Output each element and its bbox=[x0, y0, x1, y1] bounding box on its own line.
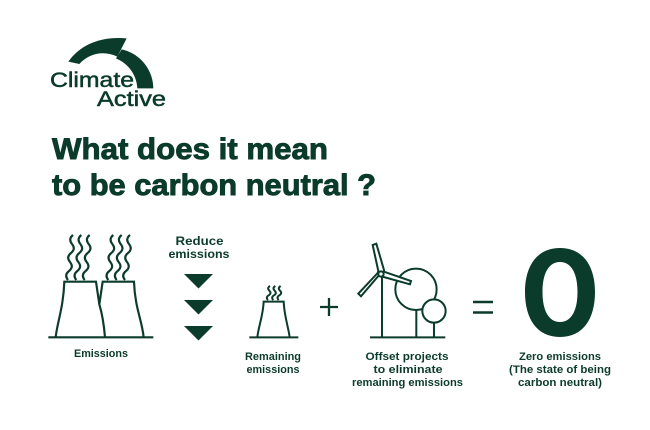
label: Offset projects: remaining emissions bbox=[352, 377, 463, 389]
icon: three down arrows bbox=[184, 274, 213, 340]
label: Emissions: Emissions bbox=[74, 348, 128, 360]
label: Remaining emissions: emissions bbox=[246, 364, 300, 376]
label: Remaining emissions: Remaining bbox=[245, 351, 301, 363]
label: Zero emissions bbox=[509, 351, 611, 389]
logo: Climate Active: Active bbox=[97, 88, 166, 111]
label: Offset projects: Offset projects bbox=[366, 351, 448, 363]
label: Offset projects: to eliminate bbox=[374, 364, 442, 376]
logo text: Climate bbox=[50, 69, 134, 92]
big zero bbox=[525, 248, 595, 337]
logo arc bbox=[68, 38, 153, 88]
label: Offset projects bbox=[352, 351, 463, 389]
label: Zero emissions: Zero emissions bbox=[519, 351, 601, 363]
heading: Reduce emissions: emissions bbox=[168, 247, 230, 261]
icon: equals bbox=[473, 302, 493, 312]
icon: plus bbox=[320, 298, 338, 316]
icon: small cooling tower bbox=[249, 286, 298, 337]
heading: Reduce emissions bbox=[168, 234, 230, 261]
icon: wind turbine and trees bbox=[358, 244, 446, 337]
logo: Climate Active bbox=[50, 38, 166, 111]
title bbox=[52, 133, 376, 202]
title: What does it mean bbox=[52, 133, 328, 166]
label: Remaining emissions bbox=[245, 351, 301, 376]
label: Zero emissions: carbon neutral) bbox=[518, 377, 602, 389]
title: to be carbon neutral ? bbox=[52, 169, 376, 202]
icon: two cooling towers with smoke bbox=[48, 235, 153, 337]
heading: Reduce emissions: Reduce bbox=[176, 234, 224, 248]
label: Zero emissions: (The state of being bbox=[509, 364, 611, 376]
